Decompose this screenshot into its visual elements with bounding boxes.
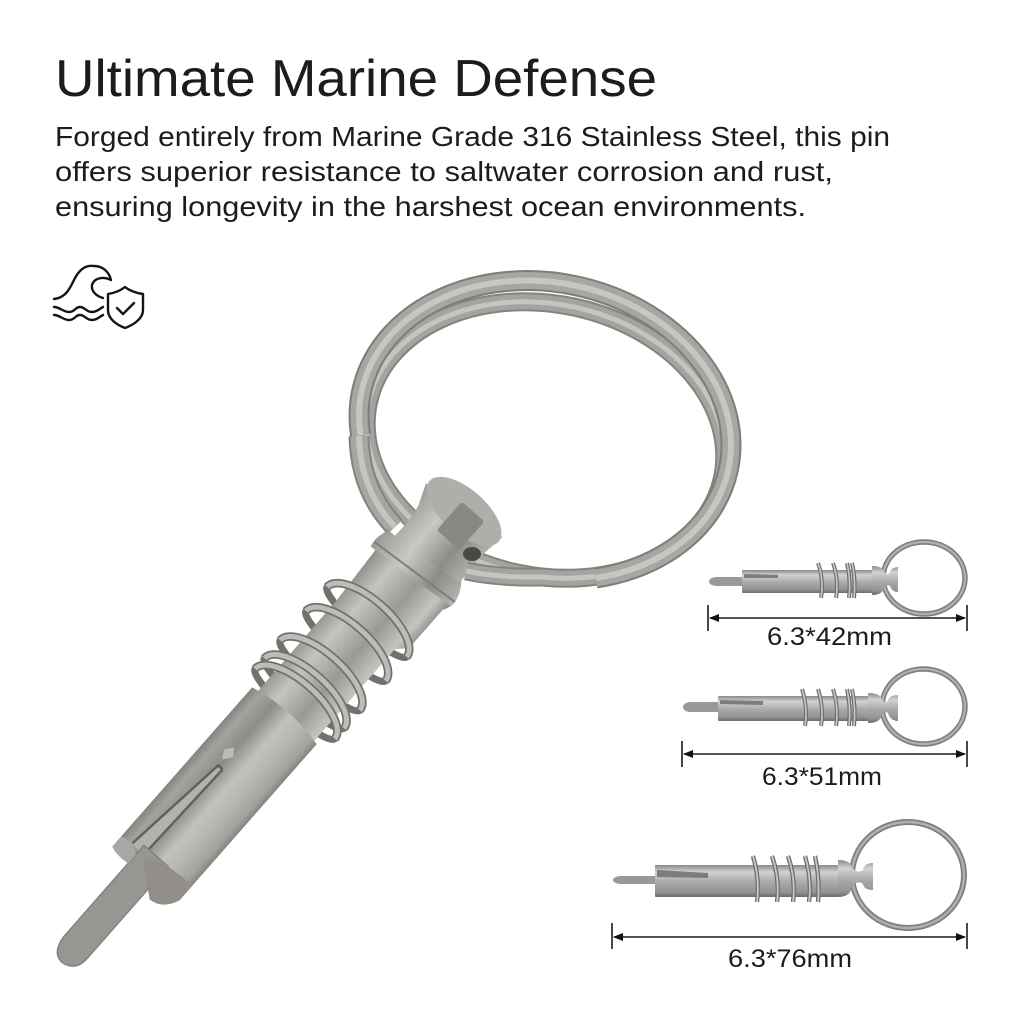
spring [818,563,855,598]
split ring [331,247,759,614]
shaft and upper cylinder [244,528,462,756]
small pin 6.3*76mm [613,822,964,928]
icon: wave and shield [54,266,143,328]
dimension: 6.3*42mm: 6.3*42mm [767,623,892,651]
ring [852,822,964,928]
dimension: 6.3*51mm: 6.3*51mm [762,763,882,791]
dimension: 6.3*51mm [682,741,967,791]
ring [883,542,965,614]
main product photo: quick release pin [25,247,759,1000]
ring [882,669,965,744]
upper end facet [110,835,140,864]
slot notch [218,743,239,764]
title: Ultimate Marine Defense [55,50,657,108]
retaining slot [130,758,221,858]
spring back arcs [249,587,407,746]
blade [613,876,658,884]
main cylinder [113,684,320,903]
spring [753,856,819,902]
dimension: 6.3*76mm [612,923,967,973]
collar line [375,536,455,608]
collar ridge [370,520,468,613]
head end face [415,465,513,558]
blade [709,577,745,586]
slot [720,700,763,705]
collar and head [872,566,898,595]
body [655,865,838,897]
small pin 6.3*51mm [683,669,965,744]
spring front arcs [255,570,421,739]
body [742,570,873,593]
description text: offers superior resistance to saltwater corrosion and rust, [55,156,833,187]
neck and flared head [385,476,502,591]
cross hole [463,547,481,561]
blade [683,702,720,712]
slot [657,870,708,878]
spring [802,689,855,726]
description text [55,121,890,222]
spring highlights [255,570,421,739]
description text: ensuring longevity in the harshest ocean environments. [55,191,806,222]
dimension: 6.3*42mm [708,605,967,651]
slot [744,574,778,578]
ring emerging from hole [466,571,540,577]
description text: Forged entirely from Marine Grade 316 Stainless Steel, this pin [55,121,890,152]
lower end facet [125,848,193,915]
slot edge lines [130,757,223,859]
dimension: 6.3*76mm: 6.3*76mm [728,945,852,973]
small pin 6.3*42mm [709,542,965,614]
knurled head patch [437,502,484,550]
collar and head [868,693,898,723]
body [718,696,868,721]
blade [50,845,168,973]
pin body [25,460,518,1000]
collar and head [838,860,873,897]
